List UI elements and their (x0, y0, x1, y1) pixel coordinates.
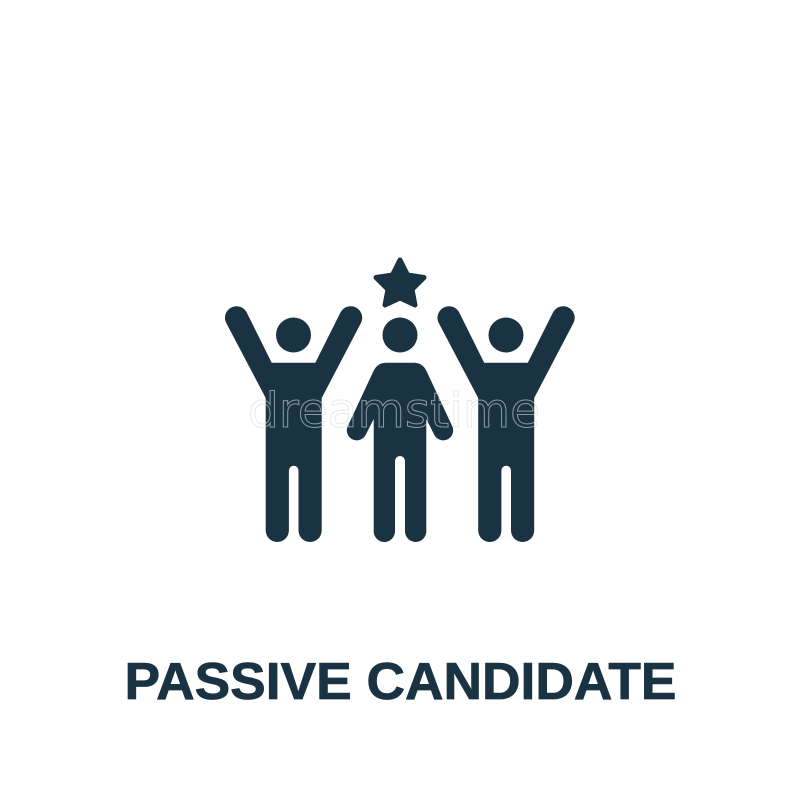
watermark: dreamstime (248, 383, 540, 439)
figure: left person arms raised (225, 306, 362, 542)
icon: three people with star (225, 260, 575, 542)
figure: middle person arms down (347, 318, 453, 542)
title: PASSIVE CANDIDATE (124, 653, 676, 711)
figure: right person arms raised (437, 306, 575, 542)
icon: star (376, 260, 424, 305)
